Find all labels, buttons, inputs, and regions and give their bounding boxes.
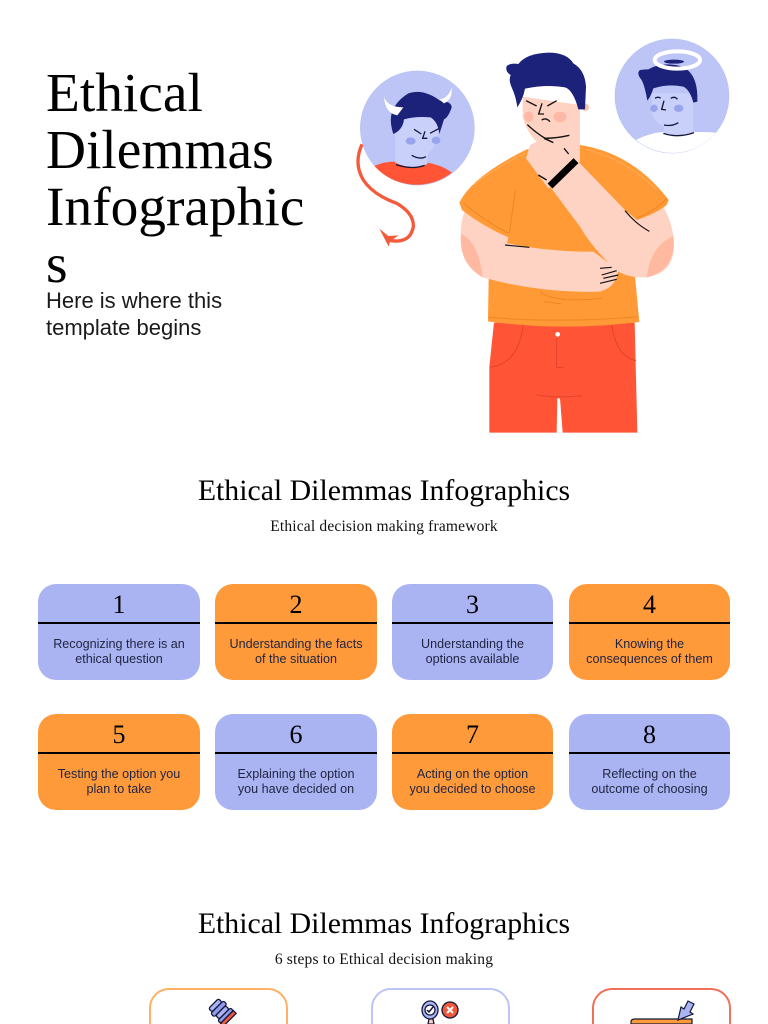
card 3: Understanding the [421,637,524,651]
subtitle: template begins [46,315,201,340]
icon: devil tail with arrow tip [358,144,413,247]
left upper arm behind the shirt [460,210,513,277]
card 8: Reflecting on the [602,767,697,781]
icon: gavel [207,997,236,1024]
card 5 [38,714,200,810]
card 2: of the situation [255,652,337,666]
step icons [208,998,695,1024]
card 4 [569,584,730,680]
card 6 [215,714,377,810]
card 5: Testing the option you [58,767,180,781]
wristband [550,161,576,186]
left forearm across the body [483,243,618,292]
heading: section 2: Ethical Dilemmas Infographics [198,907,570,940]
card 6: you have decided on [238,782,354,796]
card 3: options available [426,652,519,666]
subheading: section 2: 6 steps to Ethical decision making [275,951,493,968]
card 8: outcome of choosing [591,782,708,796]
icon: folder with pointer [631,1001,694,1024]
card 6: 6 [290,720,302,749]
card 7: 7 [466,720,479,749]
right upper arm behind the shirt [620,207,674,277]
step card 3 [592,988,731,1024]
card 7: you decided to choose [409,782,536,796]
card 4: 4 [643,590,656,619]
card 3: 3 [466,590,479,619]
pants [489,323,637,433]
title: Infographic [46,176,304,237]
right forearm raised to chin [550,161,653,277]
card 8: 8 [643,720,656,749]
card 1: Recognizing there is an [53,637,185,651]
card 7: Acting on the option [417,767,528,781]
shirt [459,145,669,327]
card 1: ethical question [75,652,163,666]
subheading: section 1: Ethical decision making framework [270,518,498,535]
icon: devil head bubble [360,71,475,185]
icon: check and cross signs [422,1001,458,1024]
card 5: 5 [112,720,126,749]
icon: angel head bubble [615,39,729,153]
card 5: plan to take [86,782,152,796]
subtitle [46,288,222,340]
neck and face [523,97,580,188]
card 4: consequences of them [586,652,713,666]
card 1 [38,584,200,680]
title: Dilemmas [46,119,274,180]
illustration: thinking man with devil and angel [356,38,730,433]
subtitle: Here is where this [46,288,222,313]
step card 1 [149,988,288,1024]
card 2: 2 [290,590,302,619]
elbow shading [461,234,674,277]
card 3 [392,584,553,680]
card 2: Understanding the facts [229,637,362,651]
card 2 [215,584,377,680]
title: s [46,233,68,294]
card 4: Knowing the [615,637,684,651]
card 6: Explaining the option [238,767,354,781]
title [46,62,304,294]
card 8 [569,714,730,810]
card 7 [392,714,553,810]
card 1: 1 [112,590,126,619]
heading: section 1: Ethical Dilemmas Infographics [198,474,570,507]
title: Ethical [46,62,203,123]
step card 2 [371,988,510,1024]
